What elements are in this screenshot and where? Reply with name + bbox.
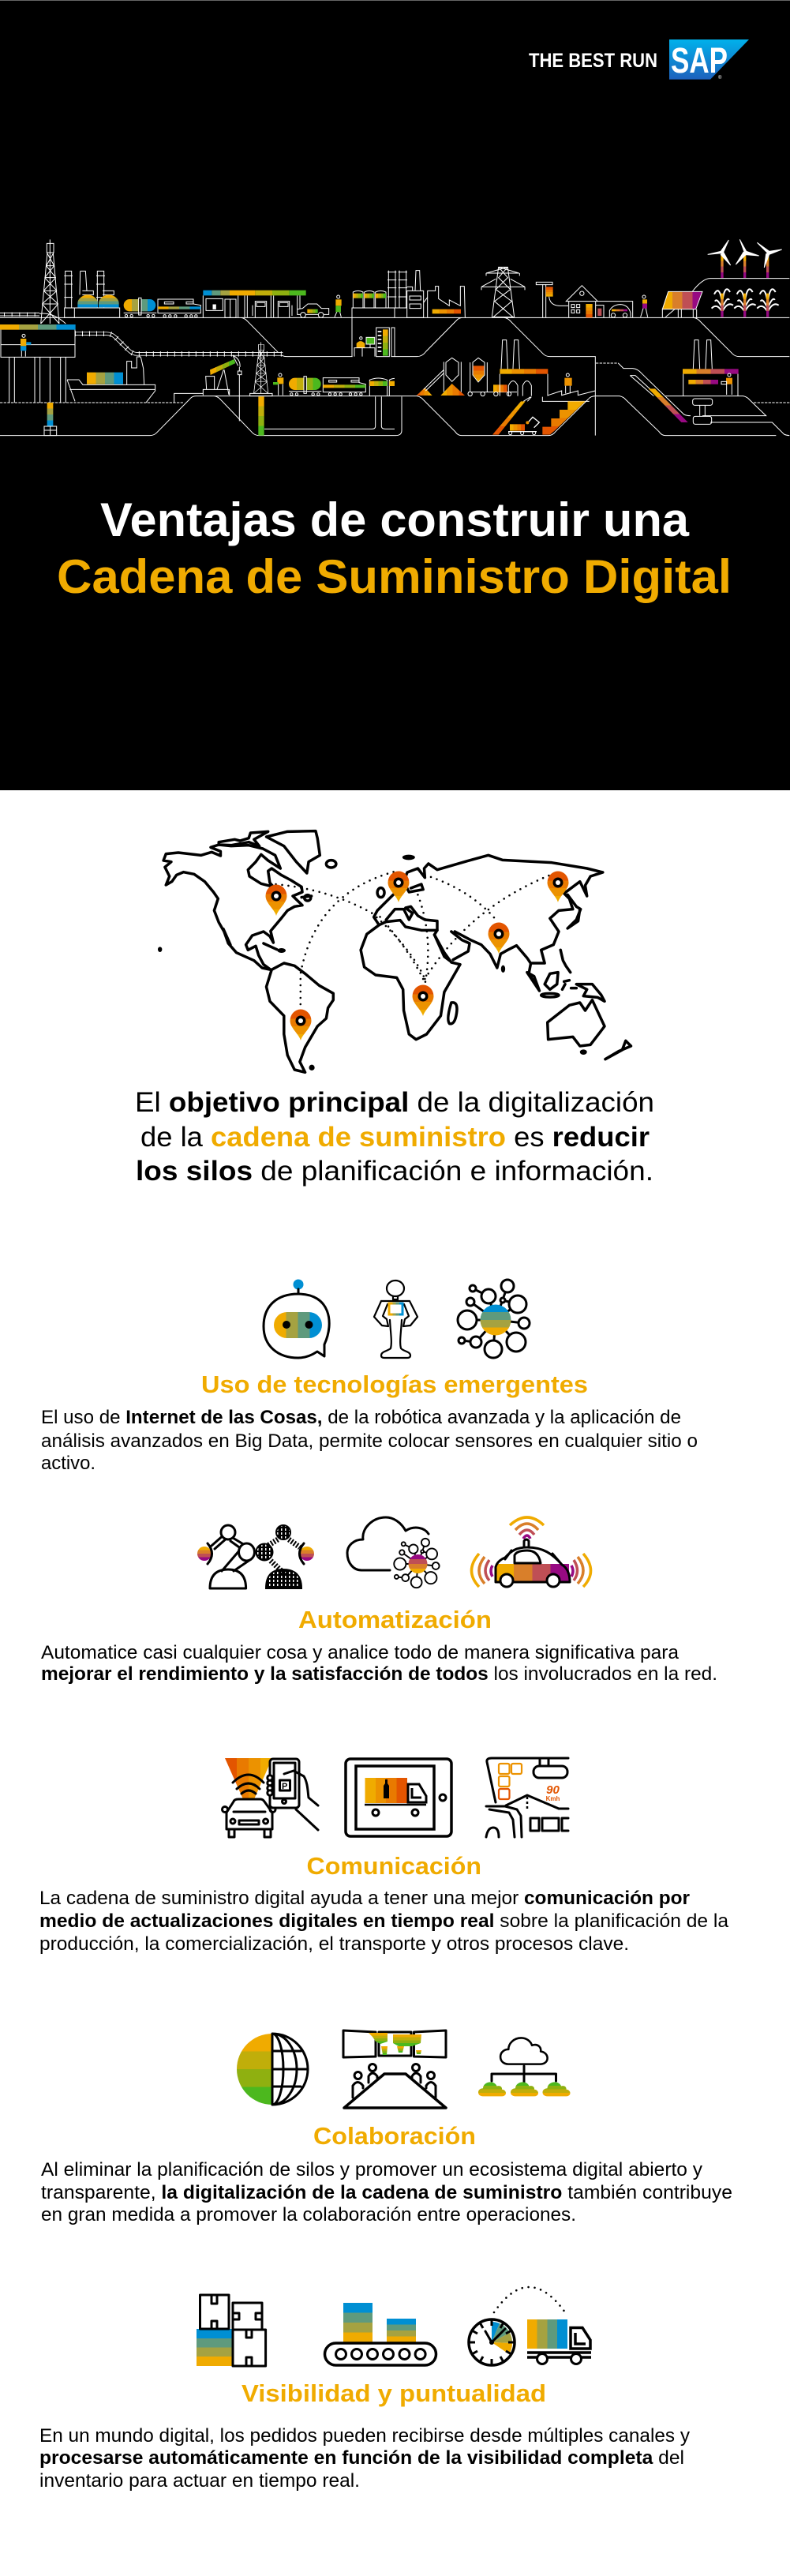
offshore derrick xyxy=(41,239,59,324)
title xyxy=(57,493,732,603)
body text xyxy=(41,2159,732,2225)
body text xyxy=(39,2425,690,2492)
illustration: supply chain, right half xyxy=(395,239,789,436)
pipeline lower xyxy=(75,334,283,354)
icon: meeting room with map xyxy=(343,2030,446,2108)
map pins xyxy=(265,872,568,1041)
tanks and underground pipe xyxy=(264,378,395,429)
icon: cloud hierarchy xyxy=(478,2038,570,2096)
body text xyxy=(39,1888,729,1955)
section: colaboración xyxy=(41,2030,732,2225)
icon: clock and truck delivery xyxy=(469,2287,591,2365)
body text: Automatice casi cualquier cosa y analice todo de manera significativa para xyxy=(41,1642,680,1663)
icon: data network xyxy=(458,1280,530,1358)
intro text: El objetivo principal de la digitalización xyxy=(135,1087,654,1118)
body text: El uso de Internet de las Cosas, de la robótica avanzada y la aplicación de xyxy=(41,1407,681,1428)
pump jack xyxy=(203,355,241,421)
logo: The Best Run SAP: SAP xyxy=(671,40,728,81)
tanker wagon 2 xyxy=(289,377,321,396)
icon: humanoid robot xyxy=(374,1281,417,1358)
corn plants xyxy=(712,289,779,317)
pipeline upper xyxy=(0,313,66,324)
waves xyxy=(596,363,789,403)
body text xyxy=(41,1407,698,1474)
body text: inventario para actuar en tiempo real. xyxy=(39,2470,360,2492)
section: visibilidad y puntualidad xyxy=(39,2287,690,2492)
worker orange xyxy=(548,373,595,396)
worker xyxy=(273,373,283,396)
icon: car and phone parking xyxy=(223,1758,318,1837)
body text: en gran medida a promover la colaboración entre operaciones. xyxy=(41,2204,576,2225)
mine xyxy=(492,397,590,435)
dotted routes xyxy=(276,871,557,1011)
icon: autonomous car xyxy=(472,1517,590,1587)
gas station xyxy=(203,291,306,317)
heading: Visibilidad y puntualidad xyxy=(241,2379,546,2407)
title: Ventajas de construir una xyxy=(100,493,690,546)
icon: chatbot bubble xyxy=(264,1279,329,1358)
car xyxy=(298,304,329,317)
icon: heads-up dashboard xyxy=(486,1758,568,1837)
icon: stacked boxes xyxy=(197,2295,266,2366)
heading: Comunicación xyxy=(306,1852,481,1880)
refinery xyxy=(64,271,120,317)
icon: conveyor belt xyxy=(325,2303,436,2365)
section: tecnologías emergentes xyxy=(41,1279,698,1474)
intro text: los silos de planificación e información. xyxy=(136,1156,653,1187)
icon: cloud network xyxy=(347,1517,440,1588)
panel: world map xyxy=(158,831,631,1072)
icon: tablet with truck xyxy=(346,1759,451,1836)
section: comunicación xyxy=(39,1758,729,1955)
icon: heads-up dashboard: Kmh xyxy=(546,1795,560,1802)
house and electric car xyxy=(566,286,633,317)
power plant and turbine xyxy=(630,340,739,424)
silos and piles xyxy=(417,358,517,396)
person walking xyxy=(641,295,648,317)
map outline xyxy=(158,831,631,1072)
body text xyxy=(41,1642,717,1685)
logo: The Best Run SAP: THE BEST RUN xyxy=(529,50,657,72)
locomotive xyxy=(158,299,200,317)
body text: En un mundo digital, los pedidos pueden recibirse desde múltiples canales y xyxy=(39,2425,690,2447)
storage tanks and base xyxy=(352,291,395,317)
body text: análisis avanzados en Big Data, permite colocar sensores en cualquier sitio o xyxy=(41,1430,698,1452)
illustration: supply chain, left half xyxy=(0,239,396,436)
tanker wagon xyxy=(124,298,156,317)
intro text: de la cadena de suministro es reducir xyxy=(140,1122,650,1153)
ship xyxy=(67,357,155,403)
icon: robot arms xyxy=(197,1525,314,1588)
heading: Colaboración xyxy=(313,2122,476,2150)
locomotive 2 xyxy=(323,378,365,396)
icon: car and phone parking: P xyxy=(282,1782,287,1791)
wind turbines xyxy=(708,239,782,278)
street lamp with charger line xyxy=(536,282,568,317)
offshore platform xyxy=(0,324,76,436)
section: automatización xyxy=(41,1517,717,1685)
body text: mejorar el rendimiento y la satisfacción de todos los involucrados en la red. xyxy=(41,1663,717,1685)
server room operator xyxy=(354,328,395,357)
derrick 2 xyxy=(250,342,272,436)
tall stacks and service building xyxy=(395,271,428,317)
logo: The Best Run SAP xyxy=(529,39,749,81)
body text: activo. xyxy=(41,1453,95,1474)
intro text xyxy=(135,1087,654,1187)
factory lower xyxy=(500,340,548,396)
wave line xyxy=(0,401,184,403)
solar panel xyxy=(662,291,702,317)
factory xyxy=(428,287,465,317)
body text: transparente, la digitalización de la cadena de suministro también contribuye xyxy=(41,2182,732,2203)
heading: Automatización xyxy=(298,1606,492,1633)
body text: procesarse automáticamente en función de la visibilidad completa del xyxy=(39,2447,684,2469)
logo: The Best Run SAP: ® xyxy=(718,75,722,81)
icon: globe xyxy=(237,2034,308,2105)
panel: header xyxy=(0,0,790,790)
title: Cadena de Suministro Digital xyxy=(57,550,732,603)
person walking xyxy=(335,295,342,317)
body text: medio de actualizaciones digitales en tiempo real sobre la planificación de la xyxy=(39,1910,729,1932)
body text: La cadena de suministro digital ayuda a tener una mejor comunicación por xyxy=(39,1888,690,1909)
body text: producción, la comercialización, el transporte y otros procesos clave. xyxy=(39,1933,629,1955)
body text: Al eliminar la planificación de silos y promover un ecosistema digital abierto y xyxy=(41,2159,702,2180)
icon: heads-up dashboard: 90 xyxy=(546,1783,560,1797)
pylon xyxy=(481,267,525,317)
heading: Uso de tecnologías emergentes xyxy=(201,1370,588,1398)
